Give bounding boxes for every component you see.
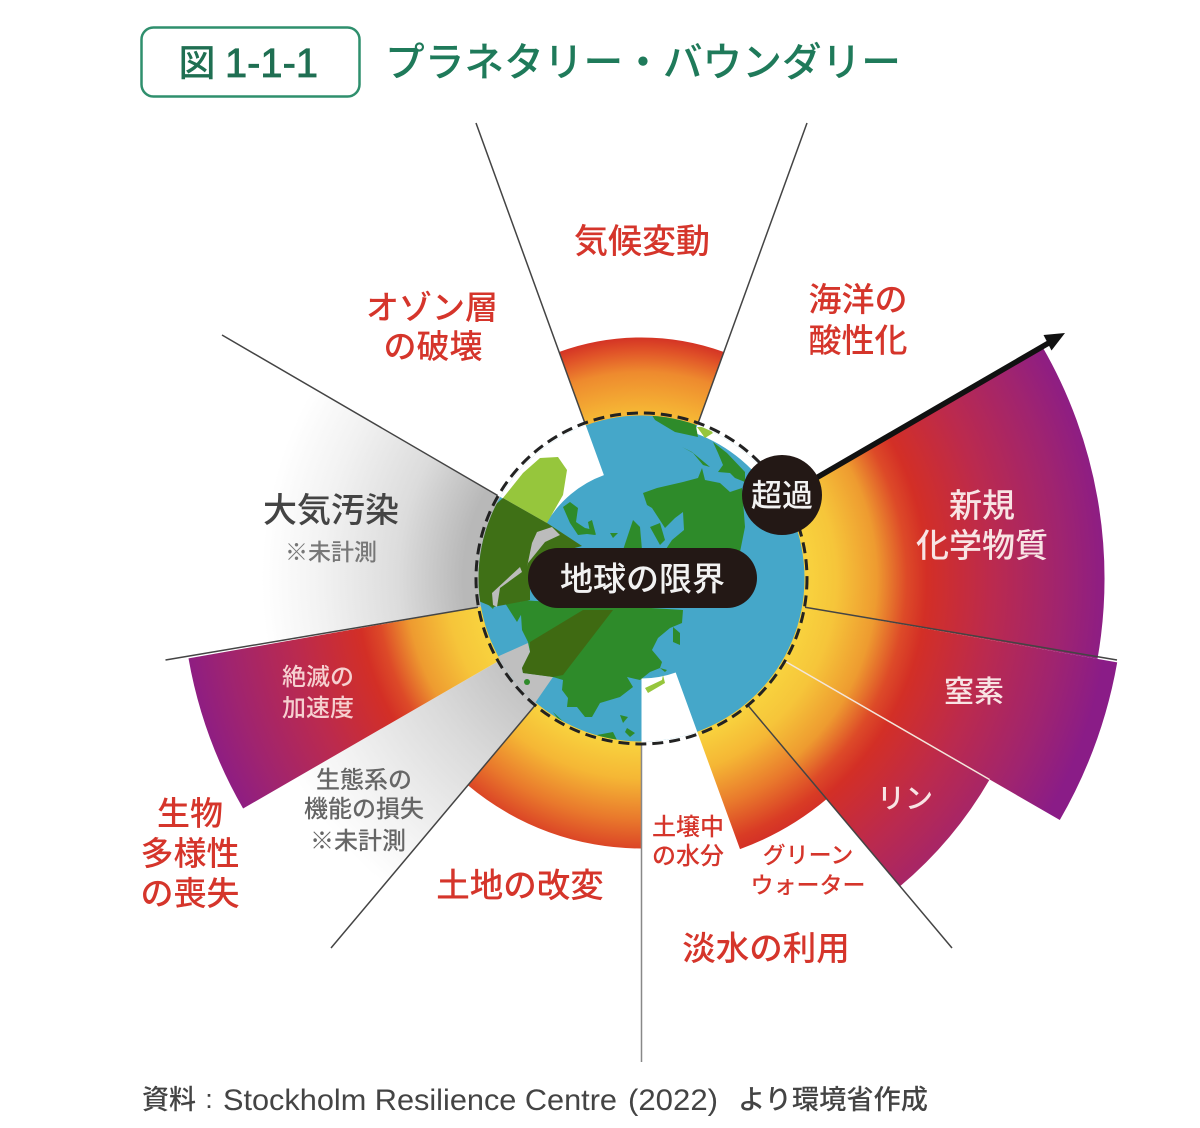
label: green water: グリーン: [763, 842, 853, 868]
ocean: [478, 414, 806, 742]
labels: [140, 223, 1048, 968]
label: extinction rate: [282, 664, 354, 722]
label: novel chemicals: 化学物質: [916, 527, 1048, 564]
label: extinction rate: 加速度: [282, 695, 354, 722]
wedge: nitrogen: [780, 606, 1117, 820]
wedge: ecosystem function: [295, 658, 539, 885]
boundary lines: [166, 123, 1117, 1062]
figure number badge: [142, 28, 360, 96]
wedge: climate change: [559, 337, 724, 428]
wedge: biodiversity extinction rate: [188, 606, 503, 808]
label: extinction rate: 絶滅の: [282, 664, 354, 691]
globe: [472, 412, 806, 749]
label: ocean acidification: [808, 281, 908, 359]
land darkened by ecosystem wedge: [522, 610, 613, 677]
label: ozone depletion: の破壊: [384, 328, 482, 365]
wedge: phosphorus: [744, 658, 990, 886]
source note: :: [205, 1084, 213, 1114]
label: biodiversity loss: [140, 795, 240, 912]
label: ozone depletion: オゾン層: [366, 289, 498, 326]
figure number badge: 1-1-1: [225, 40, 318, 86]
dashed boundary circle: [476, 413, 807, 744]
label: air pollution: ※未計測: [285, 539, 377, 565]
label: nitrogen: 窒素: [944, 676, 1004, 709]
label: ecosystem function loss: ※未計測: [310, 828, 406, 855]
center label: planetary boundaries: 地球の限界: [560, 560, 725, 598]
label: novel chemicals: [916, 487, 1048, 564]
label: green water: ウォーター: [750, 872, 866, 898]
label: soil moisture: [652, 814, 724, 870]
label: green water: [750, 842, 866, 898]
label: biodiversity loss: 多様性: [140, 835, 240, 872]
arrow: exceeded: [802, 333, 1065, 486]
label: ecosystem function loss: 生態系の: [316, 767, 412, 794]
label: ozone depletion: [366, 289, 498, 365]
label: novel chemicals: 新規: [949, 487, 1015, 524]
label: biodiversity loss: 生物: [157, 795, 223, 832]
white wedges cut into the globe: [500, 425, 758, 742]
wedge: green water: [696, 701, 827, 849]
source note: Stockholm Resilience Centre: [223, 1084, 617, 1117]
ecosystem wedge over ocean: [498, 643, 553, 702]
gray coast streaks: [492, 527, 560, 607]
label: soil moisture: の水分: [652, 843, 724, 870]
source note: 資料: [142, 1085, 196, 1115]
source note: (2022): [628, 1084, 718, 1117]
label: land system change: 土地の改変: [436, 868, 604, 905]
label: ocean acidification: 酸性化: [808, 322, 908, 359]
label: air pollution: 大気汚染: [263, 492, 399, 530]
label: air pollution: [263, 492, 399, 565]
source note: [142, 1084, 928, 1117]
land faded by white wedge: [503, 457, 567, 523]
label: biodiversity loss: の喪失: [140, 875, 240, 912]
continents: [472, 412, 745, 740]
planetary boundaries diagram: [166, 123, 1117, 1062]
label: ocean acidification: 海洋の: [808, 281, 908, 318]
wedge: novel chemicals: [780, 347, 1105, 659]
label: ecosystem function loss: 機能の損失: [304, 796, 424, 823]
land darkened by air pollution wedge: [472, 498, 582, 607]
figure number badge: 図: [178, 43, 216, 84]
small island on the gray wedge: [524, 679, 530, 685]
label: phosphorus: リン: [877, 783, 933, 814]
label: climate change: 気候変動: [574, 223, 710, 261]
center label: planetary boundaries: [528, 548, 757, 608]
exceeded badge: [742, 455, 822, 535]
wedge: air pollution: [242, 378, 503, 648]
label: soil moisture: 土壌中: [652, 814, 724, 841]
title: プラネタリー・バウンダリー: [385, 41, 901, 85]
wedge: land system change: [468, 701, 642, 848]
label: ecosystem function loss: [304, 767, 424, 855]
exceeded badge: 超過: [751, 478, 813, 514]
label: freshwater use: 淡水の利用: [682, 931, 850, 968]
source note: より環境省作成: [738, 1085, 928, 1115]
